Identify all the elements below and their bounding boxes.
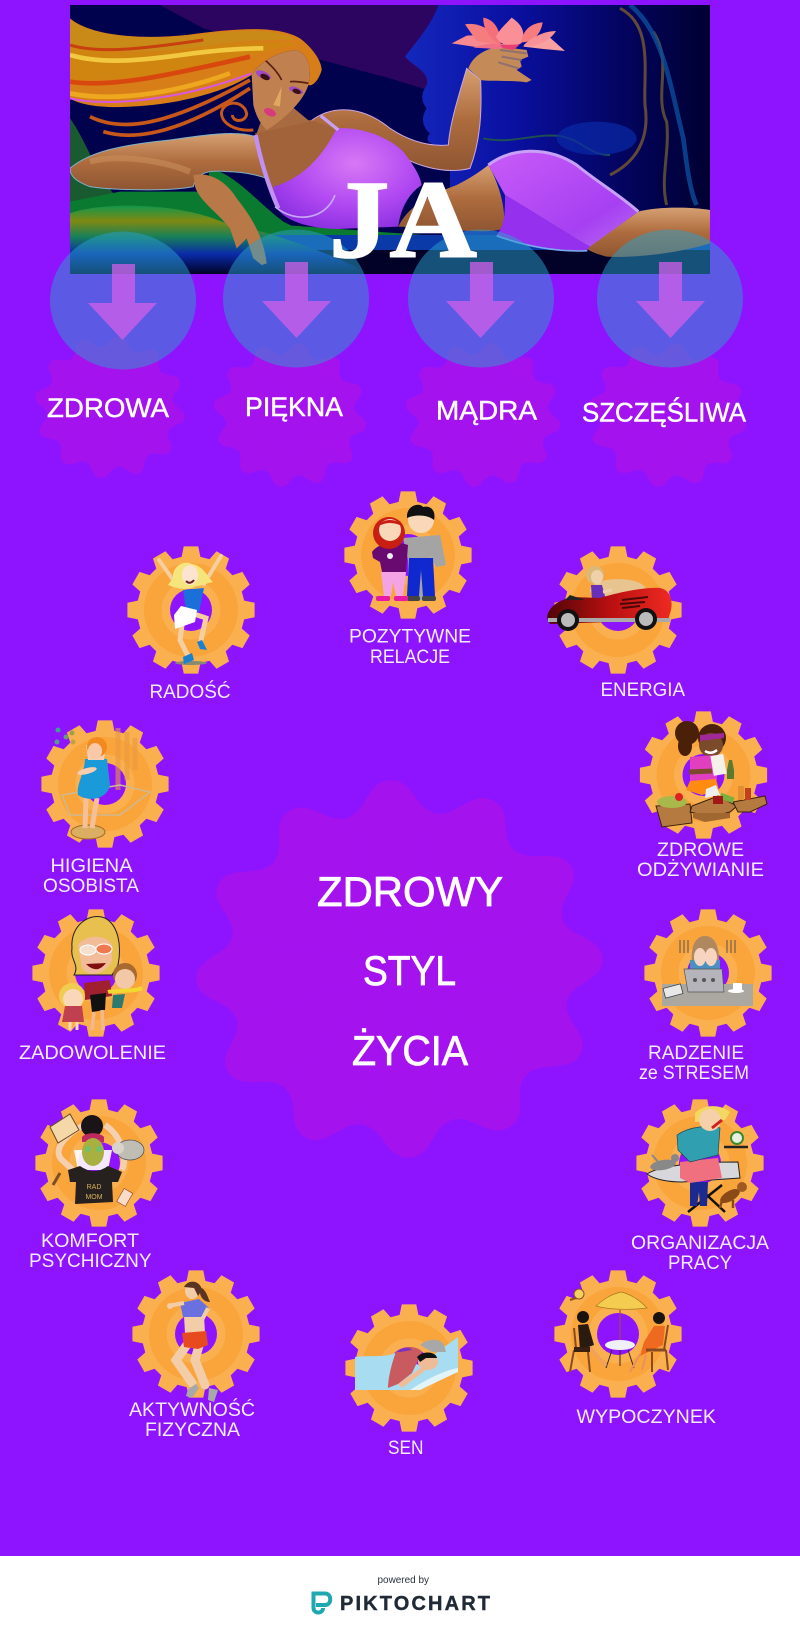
item: wypoczynek <box>554 1270 716 1428</box>
legs, waist and shorts <box>587 208 710 257</box>
label: RADOŚĆ <box>150 679 230 703</box>
circle and arrow 4 <box>597 230 743 368</box>
gear <box>127 546 255 674</box>
hand <box>468 47 532 82</box>
quality label: MĄDRA: MĄDRA <box>436 396 537 426</box>
gear <box>35 1099 163 1227</box>
gear <box>41 720 169 848</box>
gear <box>644 909 772 1037</box>
gear <box>554 1270 682 1398</box>
icon: sleeping person <box>355 1337 458 1390</box>
dress <box>273 128 422 229</box>
icon: mother with two children <box>59 917 142 1030</box>
label: ZDROWE <box>657 839 744 861</box>
central heading <box>317 868 503 1074</box>
gear <box>132 1270 260 1398</box>
label: POZYTYWNE <box>349 626 471 648</box>
chest <box>255 120 336 192</box>
item: sen <box>345 1304 473 1459</box>
icon: Piktochart logo <box>314 1594 330 1612</box>
powered by: powered by <box>378 1574 430 1586</box>
face <box>256 108 308 133</box>
central heading: ZDROWY <box>317 868 503 915</box>
left green shapes <box>70 118 113 202</box>
label: ORGANIZACJA <box>631 1232 769 1254</box>
circle and arrow 3 <box>408 230 554 368</box>
item: pozytywne relacje <box>344 491 472 668</box>
gear <box>344 491 472 619</box>
label: PRACY <box>668 1252 732 1274</box>
hair <box>70 18 322 107</box>
lotus flower <box>452 35 495 47</box>
gear <box>32 909 160 1037</box>
label: HIGIENA <box>50 855 132 877</box>
label <box>349 626 471 668</box>
blue circles with arrows <box>50 230 743 370</box>
label <box>631 1232 769 1274</box>
footer <box>0 1556 800 1636</box>
label: FIZYCZNA <box>145 1419 240 1441</box>
label: OSOBISTA <box>43 875 139 897</box>
item: aktywność fizyczna <box>129 1270 260 1441</box>
sofa mound <box>70 206 367 275</box>
gear <box>554 546 682 674</box>
blue face profile and background panel <box>405 5 710 235</box>
label: RELACJE <box>370 646 450 668</box>
title: JA: JA <box>329 159 477 282</box>
gear <box>345 1304 473 1432</box>
icon: jumping blonde girl <box>159 556 221 665</box>
label: RADZENIE <box>648 1042 744 1064</box>
quality label: PIĘKNA: PIĘKNA <box>245 392 343 422</box>
icon: running woman <box>167 1282 218 1402</box>
hair wisps and spiral <box>90 80 250 125</box>
icon: woman in red car <box>547 566 672 631</box>
wavy lines <box>610 8 646 175</box>
gear <box>636 1099 764 1227</box>
icon: mom with face mask, cat and book: MOM <box>85 1194 103 1201</box>
gear <box>640 711 767 839</box>
label <box>637 839 764 881</box>
icon: stressed woman at laptop <box>662 936 753 1006</box>
label: ODŻYWIANIE <box>637 858 764 881</box>
raised arm <box>310 68 481 170</box>
circle and arrow 2 <box>223 230 369 368</box>
icon: couple <box>372 505 446 601</box>
label <box>43 855 139 897</box>
Piktochart wordmark: PIKTOCHART <box>340 1593 490 1615</box>
central heading: STYL <box>363 947 456 994</box>
icon: two women at cafe table <box>570 1289 668 1372</box>
icon: woman in towel on scale <box>54 728 150 839</box>
label <box>639 1042 749 1084</box>
quality label: ZDROWA: ZDROWA <box>47 393 169 423</box>
label <box>129 1397 255 1441</box>
left arm <box>70 133 267 190</box>
item: higiena osobista <box>41 720 169 897</box>
label <box>29 1230 152 1272</box>
icon: mom with face mask, cat and book: RAD <box>87 1184 101 1191</box>
item: radość <box>127 546 255 703</box>
icon: girl with groceries <box>656 721 767 827</box>
label: KOMFORT <box>41 1230 139 1252</box>
main heading gear background <box>186 770 613 1168</box>
item: zdrowe odżywianie <box>637 711 767 881</box>
label: ze STRESEM <box>639 1062 749 1084</box>
circle and arrow 1 <box>50 232 196 370</box>
label: ZADOWOLENIE <box>19 1042 166 1064</box>
icon: busy woman ironing with pets <box>647 1106 748 1212</box>
quality label: SZCZĘŚLIWA: SZCZĘŚLIWA <box>582 396 746 428</box>
banner illustration: reclining woman with lotus <box>70 5 710 275</box>
item: komfort psychiczny <box>29 1099 163 1272</box>
central heading: ŻYCIA <box>352 1027 468 1074</box>
label: ENERGIA <box>600 679 685 701</box>
icon: mom with face mask, cat and book <box>50 1114 144 1206</box>
label: SEN <box>388 1437 424 1459</box>
label: PSYCHICZNY <box>29 1250 152 1272</box>
label: AKTYWNOŚĆ <box>129 1397 255 1421</box>
item: organizacja pracy <box>631 1099 769 1274</box>
item: energia <box>547 546 685 701</box>
item: zadowolenie <box>19 909 166 1064</box>
item: radzenie ze stresem <box>639 909 772 1084</box>
text gears behind the four qualities <box>25 326 756 498</box>
label: WYPOCZYNEK <box>576 1406 716 1428</box>
